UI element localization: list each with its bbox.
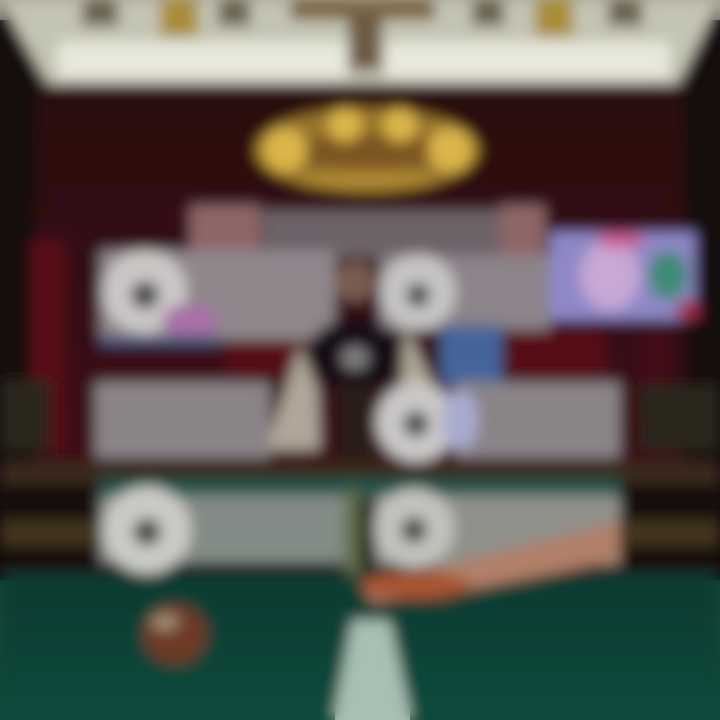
panel row: lower — [95, 382, 620, 462]
colourful panel right — [550, 232, 700, 320]
central figure — [265, 262, 440, 470]
icon: ball — [143, 604, 207, 664]
panel row: bottom — [100, 486, 620, 575]
table rail — [0, 380, 720, 546]
green table — [0, 572, 720, 720]
panel row: top — [190, 205, 545, 260]
chandelier — [255, 108, 479, 192]
panel row: middle left — [100, 250, 335, 345]
ceiling — [0, 0, 720, 84]
panel row: middle centre and right — [380, 254, 550, 385]
orange wedge — [360, 522, 620, 603]
